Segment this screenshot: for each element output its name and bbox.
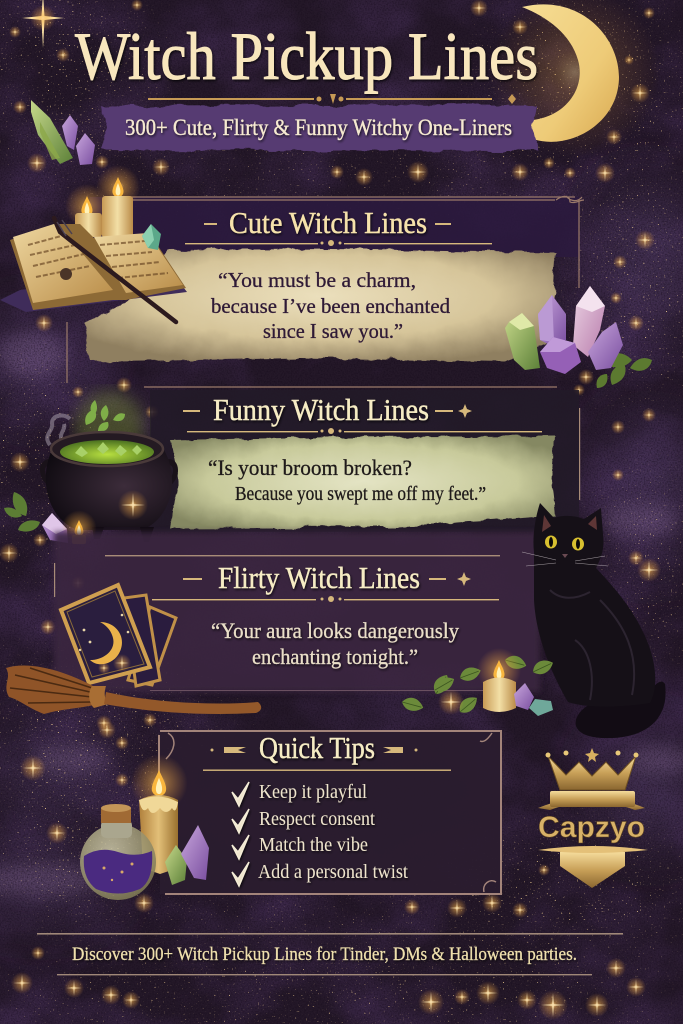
parchment <box>83 249 556 362</box>
ornament rule under title <box>148 94 516 104</box>
subtitle text: 300+ Cute, Flirty & Funny Witchy One-Liners <box>125 115 512 140</box>
tips checklist: Respect consent <box>259 808 375 830</box>
heading: cute witch lines: Cute Witch Lines <box>229 205 427 240</box>
icon: crystals top left <box>31 100 95 165</box>
tips checklist: Match the vibe <box>259 834 368 856</box>
subtitle banner <box>100 105 538 151</box>
tips checklist: Keep it playful <box>259 781 367 803</box>
icon: black cat <box>522 503 666 738</box>
quote text: because I’ve been enchanted <box>211 294 450 318</box>
parchment <box>170 436 555 528</box>
panel: cute witch lines <box>67 196 584 387</box>
tips checklist: Add a personal twist <box>258 861 408 883</box>
quote text: “You must be a charm, <box>218 268 416 292</box>
logo: capzyo <box>538 748 648 888</box>
heading: quick tips: Quick Tips <box>259 730 375 765</box>
panel: quick tips <box>159 730 501 894</box>
icon: bubbling cauldron <box>4 391 178 546</box>
footer text: Discover 300+ Witch Pickup Lines for Tinder, DMs & Halloween parties. <box>72 944 577 965</box>
heading flourish <box>185 223 492 246</box>
quote text: since I saw you.” <box>263 319 403 343</box>
icon: candle, leaves and gems <box>400 648 555 717</box>
logo wordmark: Capzyo <box>538 811 645 844</box>
panel: flirty witch lines <box>54 532 540 692</box>
heading flourish <box>183 404 542 434</box>
quote text: “Your aura looks dangerously <box>211 618 459 643</box>
heading: flirty witch lines: Flirty Witch Lines <box>218 560 420 595</box>
quote text: “Is your broom broken? <box>208 455 412 480</box>
icon: tarot cards and broom <box>6 585 261 714</box>
tips checklist <box>232 781 408 886</box>
quote text <box>211 618 459 669</box>
heading: funny witch lines: Funny Witch Lines <box>213 392 429 427</box>
icon: potion, candle and crystals <box>80 754 209 900</box>
quote text: enchanting tonight.” <box>252 644 418 669</box>
quote text <box>208 455 486 505</box>
heading flourish <box>203 747 451 771</box>
heading flourish <box>152 572 499 602</box>
panel: funny witch lines <box>150 390 580 532</box>
quote text: Because you swept me off my feet.” <box>235 483 486 505</box>
moon <box>490 0 660 157</box>
icon: crystal cluster right <box>505 286 652 388</box>
icon: open spell book with candles <box>0 165 187 322</box>
title: Witch Pickup Lines <box>75 18 538 94</box>
quote text <box>211 268 450 343</box>
